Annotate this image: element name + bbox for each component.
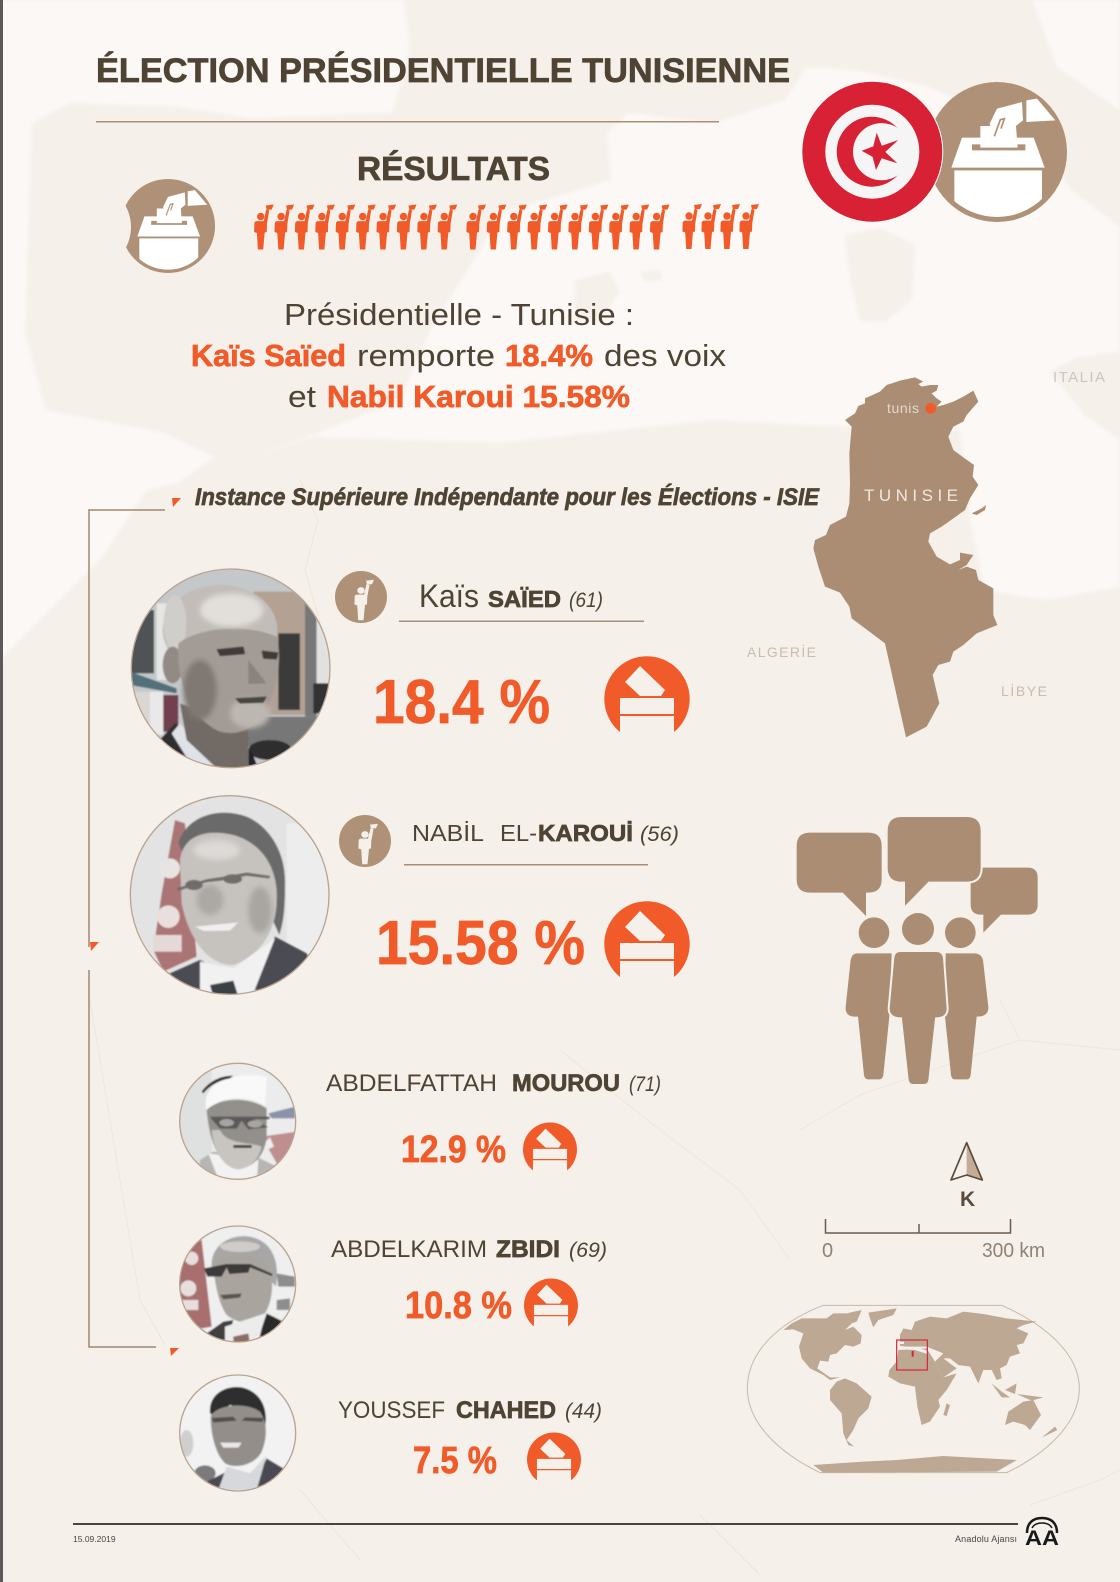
name: Youssef Chahed: YOUSSEF <box>338 1397 445 1424</box>
name: Abdelfattah Mourou: ABDELFATTAH <box>326 1070 497 1097</box>
name: Youssef Chahed: (44) <box>565 1400 602 1423</box>
title: ÉLECTION PRÉSIDENTIELLE TUNISIENNE <box>96 52 790 90</box>
headline text: 18.4% <box>505 338 593 373</box>
portrait: Kaïs Saïed <box>130 567 333 773</box>
icon: vote 3 <box>523 1122 577 1170</box>
value: 7.5%: 7.5 % <box>413 1440 497 1482</box>
value: 18.4%: 18.4 % <box>373 668 550 737</box>
name: Kaïs Saïed <box>419 578 603 614</box>
name rule <box>404 864 648 866</box>
icon: Tunisian flag <box>801 81 943 223</box>
left page edge <box>0 0 3 1582</box>
headline text: et <box>288 379 316 414</box>
name: Nabil El-Karoui: (56) <box>640 823 679 846</box>
icon: ballot box large <box>927 82 1067 227</box>
headline text: Présidentielle - Tunisie : <box>284 297 634 332</box>
label: Italia: ITALIA <box>1053 369 1105 386</box>
title rule <box>96 121 719 122</box>
name: Youssef Chahed <box>338 1397 602 1424</box>
headline text <box>191 297 727 414</box>
label: Libye: LİBYE <box>1001 682 1047 699</box>
icon: north arrow <box>951 1143 982 1180</box>
footer rule <box>73 1523 1018 1525</box>
icon: candidate 2 <box>339 815 391 867</box>
name: Kaïs Saïed: (61) <box>569 589 603 612</box>
headline text: des voix <box>604 338 727 373</box>
name: Abdelfattah Mourou: MOUROU <box>512 1070 620 1097</box>
source line: Instance Supérieure Indépendante pour les Élections - ISIE <box>195 483 820 511</box>
portrait: Abdelkarim Zbidi <box>178 1225 298 1345</box>
footer date: 15.09.2019 <box>73 1534 116 1544</box>
headline text: remporte <box>357 338 495 373</box>
headline text: Kaïs Saïed <box>191 338 346 373</box>
scale bar: 300 km <box>982 1240 1045 1262</box>
name: Nabil El-Karoui: EL- <box>500 820 537 846</box>
footer source: Anadolu Ajansı <box>955 1534 1017 1544</box>
world locator map <box>747 1305 1079 1473</box>
name: Abdelkarim Zbidi: (69) <box>569 1239 607 1262</box>
row of voter figures <box>254 204 759 250</box>
icon: crowd with speech bubbles <box>797 816 1038 1085</box>
value: 15.58%: 15.58 % <box>376 909 585 978</box>
icon: ballot box small <box>43 179 215 276</box>
name: Abdelfattah Mourou: (71) <box>629 1073 661 1096</box>
timeline bracket <box>89 498 181 1356</box>
name: Abdelfattah Mourou <box>326 1070 661 1097</box>
label: tunis: tunis <box>887 400 919 416</box>
name: Nabil El-Karoui: NABİL <box>412 820 484 846</box>
logo: Anadolu Agency <box>1025 1518 1059 1550</box>
logo: Anadolu Agency: AA <box>1025 1527 1059 1550</box>
label: north K: K <box>960 1188 975 1211</box>
icon: vote 4 <box>524 1278 578 1326</box>
name: Youssef Chahed: CHAHED <box>456 1397 556 1424</box>
map: Tunisia <box>813 377 997 737</box>
name: Abdelkarim Zbidi: ZBIDI <box>496 1236 560 1263</box>
name: Nabil El-Karoui <box>412 820 679 846</box>
icon: candidate 1 <box>335 571 387 623</box>
label: Algérie: ALGERİE <box>747 643 816 660</box>
name: Nabil El-Karoui: KAROUİ <box>538 820 633 846</box>
scale bar: 0 <box>822 1240 833 1262</box>
heading: results: RÉSULTATS <box>357 150 550 187</box>
name: Kaïs Saïed: SAÏED <box>488 586 561 612</box>
scale bar <box>822 1219 1045 1262</box>
icon: vote 5 <box>527 1432 581 1480</box>
icon: vote 2 <box>604 901 690 977</box>
label: Tunisie: TUNISIE <box>864 486 958 505</box>
value: 12.9%: 12.9 % <box>401 1129 506 1171</box>
portrait: Youssef Chahed <box>178 1373 298 1493</box>
name rule <box>399 620 644 622</box>
headline text: Nabil Karoui 15.58% <box>327 379 630 414</box>
value: 10.8%: 10.8 % <box>405 1285 512 1327</box>
portrait: Nabil El-Karoui <box>130 793 330 997</box>
portrait: Abdelfattah Mourou <box>178 1062 298 1183</box>
name: Kaïs Saïed: Kaïs <box>419 578 479 614</box>
name: Abdelkarim Zbidi: ABDELKARIM <box>331 1236 487 1263</box>
name: Abdelkarim Zbidi <box>331 1236 607 1263</box>
icon: vote 1 <box>604 656 690 732</box>
